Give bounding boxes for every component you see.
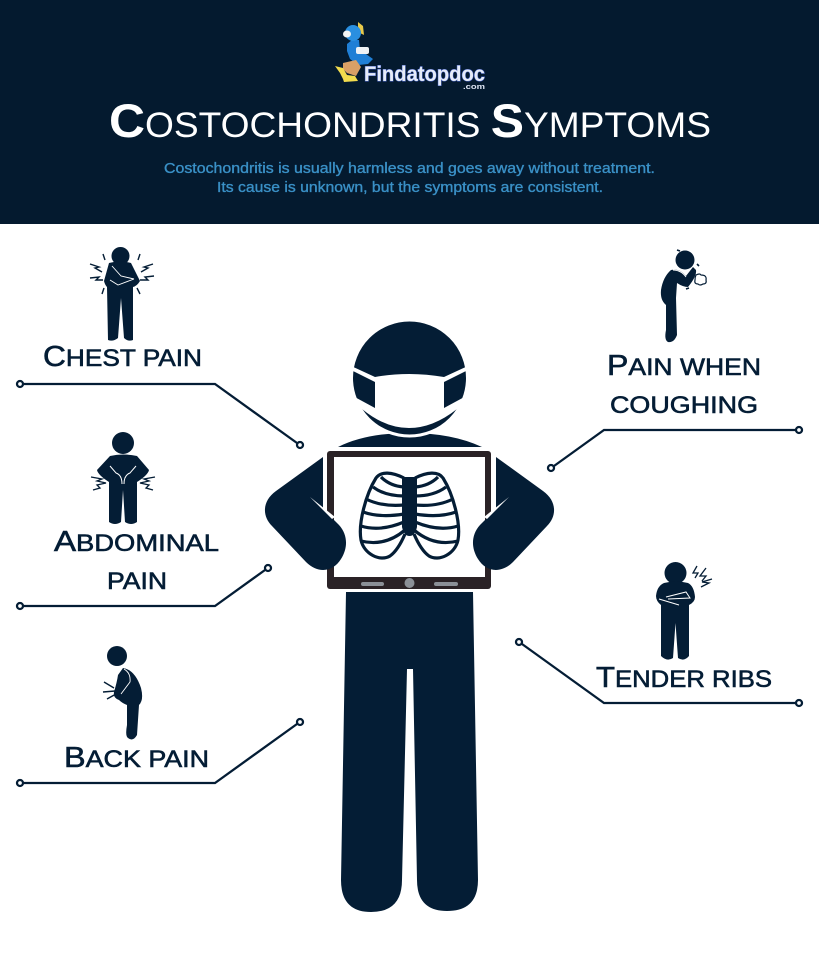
icon: coughing figure <box>661 250 706 342</box>
label: ABDOMINAL <box>54 526 219 558</box>
label: TENDER RIBS <box>596 662 772 694</box>
label: COUGHING <box>610 392 758 419</box>
arms <box>265 457 554 570</box>
icon: back pain figure <box>103 646 142 739</box>
leader line <box>17 381 303 448</box>
subtitle <box>164 161 655 196</box>
item: chest pain <box>17 247 303 448</box>
panel: header <box>0 0 819 224</box>
central figure: person holding x-ray <box>265 320 554 912</box>
item: abdominal pain <box>17 432 271 609</box>
head with mask <box>349 320 470 436</box>
legs <box>341 592 478 912</box>
leader line <box>516 639 802 706</box>
leader line <box>17 565 271 609</box>
leader line <box>548 427 802 471</box>
logo <box>335 22 485 91</box>
label: PAIN <box>107 568 167 595</box>
title: COSTOCHONDRITIS SYMPTOMS <box>109 94 711 147</box>
item: tender ribs <box>516 562 802 706</box>
icon: abdominal figure <box>91 432 155 524</box>
label: CHEST PAIN <box>43 341 202 373</box>
subtitle: Its cause is unknown, but the symptoms are consistent. <box>217 180 603 196</box>
item: pain when coughing <box>548 250 802 471</box>
label <box>607 350 761 419</box>
icon: tender ribs figure <box>656 562 712 660</box>
icon: duck mascot <box>335 22 373 82</box>
label: PAIN WHEN <box>607 350 761 382</box>
item: back pain <box>17 646 303 786</box>
label: BACK PAIN <box>64 742 209 774</box>
logo: .com <box>463 84 485 91</box>
logo: Findatopdoc <box>364 63 485 86</box>
icon: chest pain figure <box>90 247 154 341</box>
torso shoulders <box>338 433 482 447</box>
chart: rib cage x-ray <box>360 473 459 558</box>
label <box>54 526 219 595</box>
subtitle: Costochondritis is usually harmless and goes away without treatment. <box>164 161 655 177</box>
x-ray tablet <box>327 451 491 589</box>
leader line <box>17 719 303 786</box>
